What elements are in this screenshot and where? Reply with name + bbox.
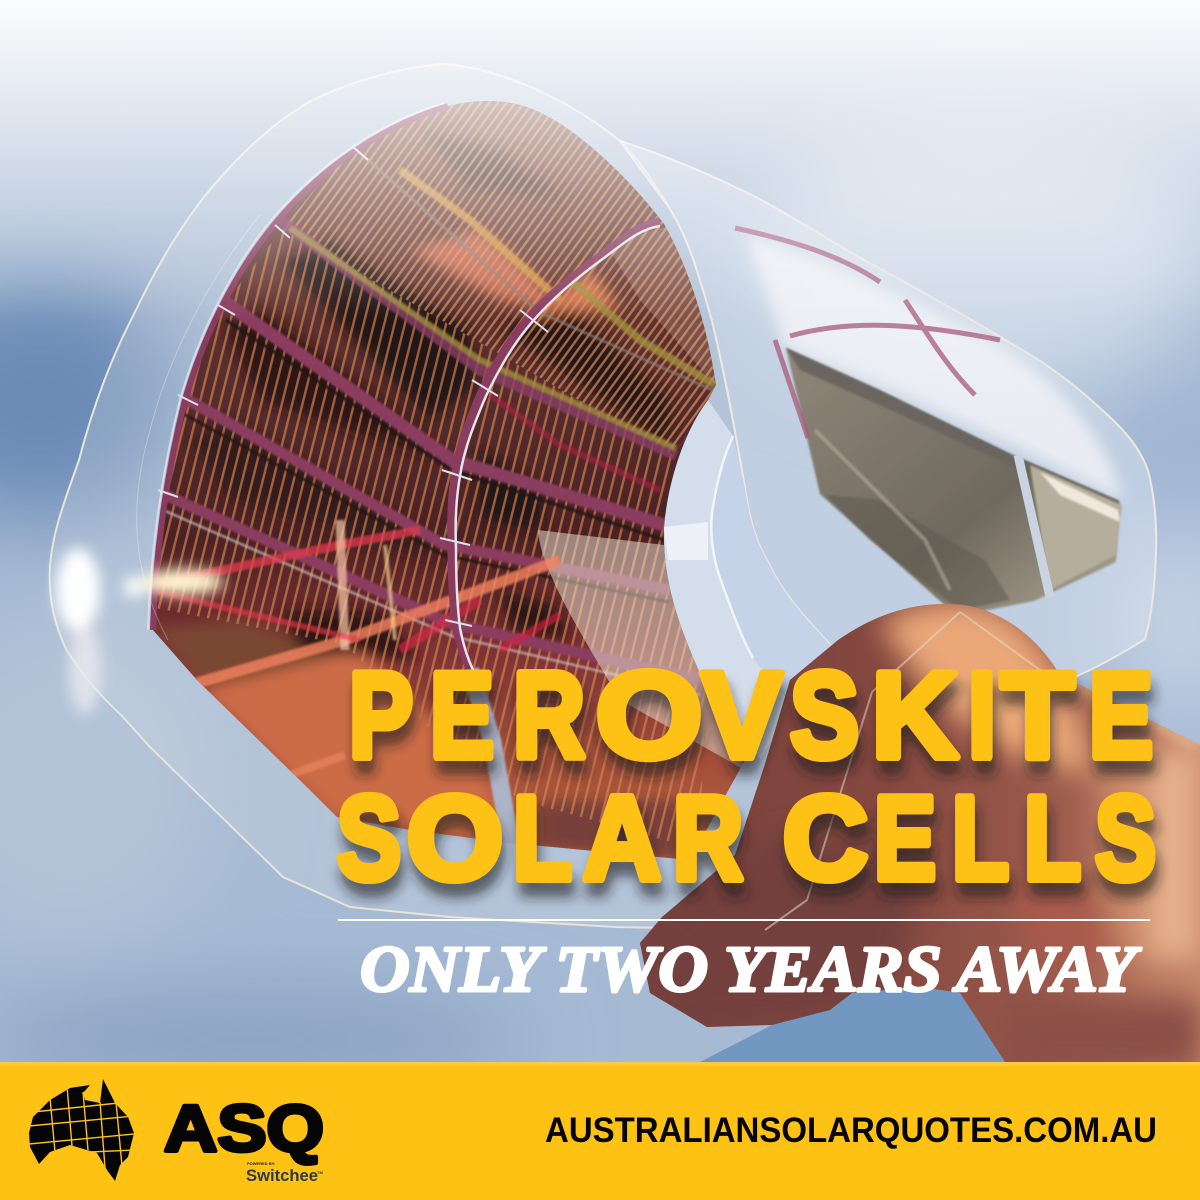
photo: vertical arc and cell borders [137,103,660,670]
title line 1: PEROVSKITE: V [702,647,782,783]
website address: AUSTRALIANSOLARQUOTES.COM.AU [545,1111,1157,1150]
photo: film edge over the hand [765,612,1075,930]
title line 2: SOLAR CELLS [337,772,1156,905]
pale reflection over the lower cells [538,530,745,770]
dark and bright light patches on the cells [153,130,680,860]
title line 1: PEROVSKITE: P [349,647,413,783]
title line 2: SOLAR CELLS: O [407,772,503,905]
pale continuation of the arc [470,670,512,850]
photo: top fade to white [0,0,1200,320]
powered by Switchee: TM [317,1170,323,1175]
title line 1: PEROVSKITE: I [968,647,996,783]
title line 1: PEROVSKITE: O [596,647,702,783]
title line 2: SOLAR CELLS: S [337,772,401,905]
title line 2: SOLAR CELLS: S [1095,772,1156,905]
subtitle: ONLY TWO YEARS AWAY [360,933,1142,1006]
title line 1: PEROVSKITE: E [1089,647,1153,783]
title line 2: SOLAR CELLS: A [583,772,661,905]
photo: inner ring and hole of the roll [664,400,872,760]
red flare streaks [130,520,560,775]
title line 2: SOLAR CELLS: R [673,772,743,905]
title line 1: PEROVSKITE: E [430,647,494,783]
photo: hand holding the film [620,590,1200,1070]
title line 2: SOLAR CELLS: E [874,772,936,905]
title line 1: PEROVSKITE: T [1001,647,1074,783]
title line 2: SOLAR CELLS: L [952,772,1009,905]
title line 1: PEROVSKITE [349,647,1153,783]
title line 1: PEROVSKITE: S [790,647,859,783]
powered by Switchee: Switchee [246,1166,318,1185]
footer bar [0,1062,1200,1200]
photo: mirrored back panel [735,228,1122,616]
title line 2: SOLAR CELLS: L [1024,772,1081,905]
title line 2: SOLAR CELLS: C [783,772,868,905]
title line 1: PEROVSKITE: R [513,647,585,783]
module bands [161,150,715,695]
photo: bright sun glare [56,548,224,714]
logo wordmark: ASQ: ASQ [164,1091,324,1165]
title line 2: SOLAR CELLS: L [513,772,572,905]
icon: Australia solar panel logo [29,1079,134,1181]
powered by Switchee: POWERED BY: [247,1161,275,1166]
divider line [338,919,1150,921]
title line 1: PEROVSKITE: K [872,647,958,783]
photo: transparent film roll [50,64,1156,930]
title [337,647,1156,905]
photo: solar cell array [153,100,744,859]
